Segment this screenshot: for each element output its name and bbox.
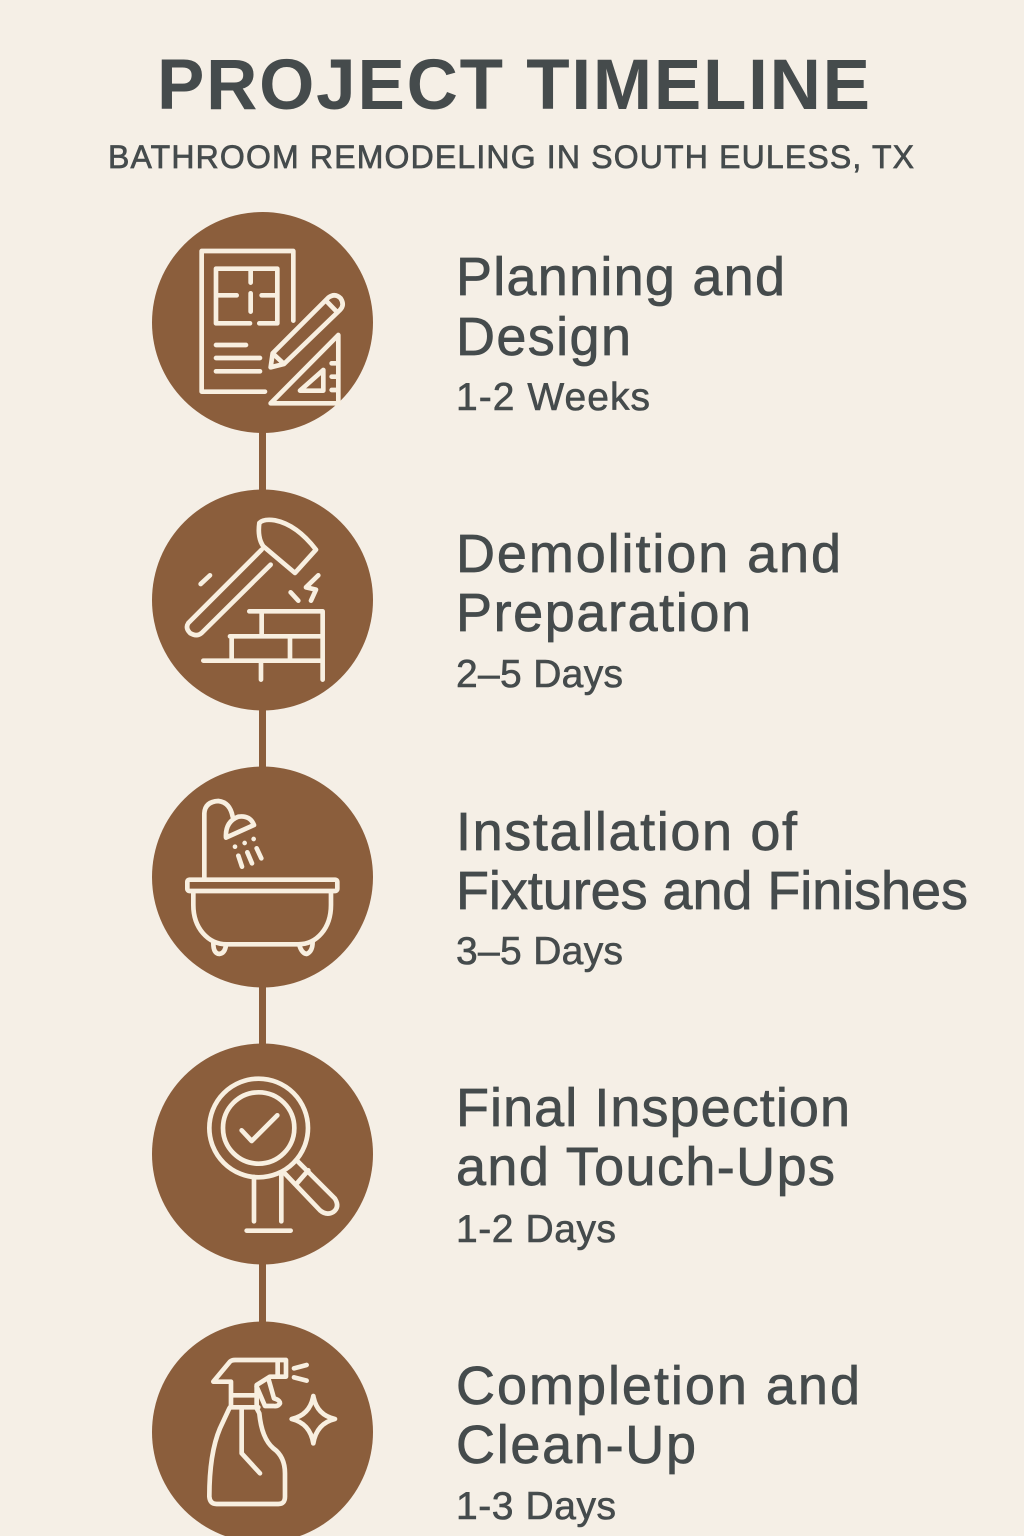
- icon: blueprint, pencil and set square: [152, 212, 373, 433]
- step 1 heading line 2: Design: [456, 307, 631, 367]
- step 4 heading: Final Inspection: [456, 1078, 850, 1138]
- icon: magnifying glass with check: [152, 1044, 373, 1264]
- step 2 heading: Demolition and: [456, 524, 841, 584]
- icon: hammer and bricks: [152, 490, 373, 710]
- timeline connector line: [259, 322, 266, 1432]
- icon: spray bottle and sparkle: [152, 1322, 373, 1536]
- step 2: demolition and preparation: [152, 490, 841, 710]
- subtitle: BATHROOM REMODELING IN SOUTH EULESS, TX: [108, 139, 914, 175]
- step 1 duration: 1-2 Weeks: [456, 376, 650, 419]
- step 4 duration: 1-2 Days: [456, 1208, 616, 1251]
- step 2 heading line 2: Preparation: [456, 583, 751, 643]
- step 5 duration: 1-3 Days: [456, 1485, 616, 1528]
- title: PROJECT TIMELINE: [157, 46, 870, 125]
- step 3: installation of fixtures and finishes: [152, 766, 968, 988]
- step 5 heading: Completion and: [456, 1356, 860, 1416]
- step 1 heading: Planning and: [456, 247, 785, 307]
- step 2 duration: 2–5 Days: [456, 653, 623, 696]
- step 5: completion and clean-up: [152, 1322, 860, 1536]
- step 1: planning and design: [152, 212, 785, 433]
- icon: bathtub and shower: [152, 766, 373, 988]
- step 4 heading line 2: and Touch-Ups: [456, 1137, 835, 1197]
- step 3 heading: Installation of: [456, 802, 798, 862]
- step 5 heading line 2: Clean-Up: [456, 1415, 696, 1475]
- step 3 heading line 2: Fixtures and Finishes: [456, 861, 968, 921]
- step 4: final inspection and touch-ups: [152, 1044, 850, 1264]
- step 3 duration: 3–5 Days: [456, 930, 623, 973]
